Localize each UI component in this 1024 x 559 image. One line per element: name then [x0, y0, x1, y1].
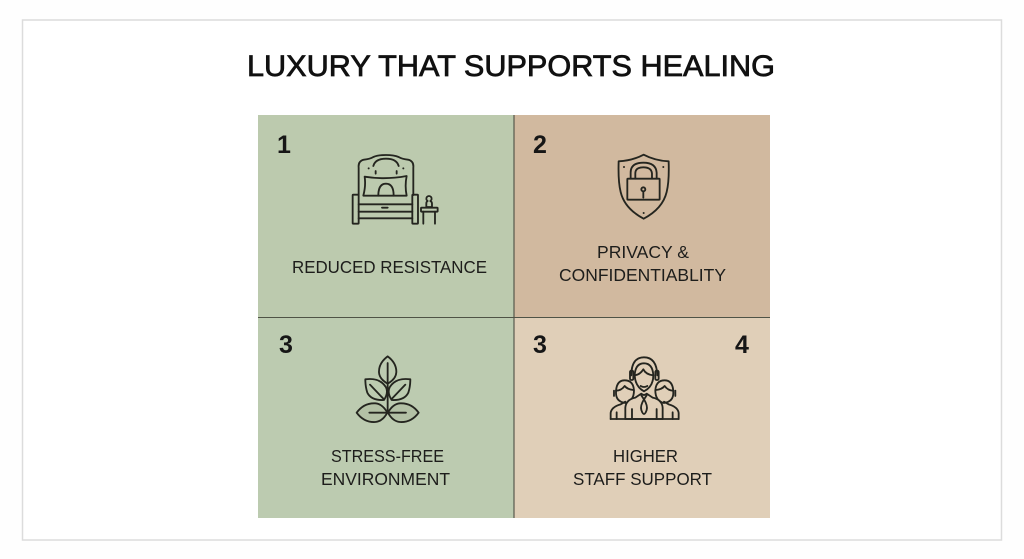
- panel: stress-free environment: ENVIRONMENT: [321, 469, 450, 489]
- number 1: 1: [277, 131, 291, 159]
- panel: higher staff support: STAFF SUPPORT: [573, 469, 712, 489]
- icon: shield with padlock: [619, 155, 669, 219]
- number 2: 2: [533, 131, 547, 159]
- label: REDUCED RESISTANCE: [292, 257, 487, 277]
- label: STRESS-FREE: [331, 446, 444, 466]
- number 3: 3: [279, 331, 293, 359]
- left staff member: [611, 380, 634, 419]
- panel: reduced resistance: [258, 115, 514, 317]
- panel: privacy and confidentiality: [514, 115, 770, 317]
- label: PRIVACY &: [597, 242, 689, 262]
- icon: staff group: [611, 357, 679, 419]
- panel: privacy and confidentiality: CONFIDENTIABLITY: [559, 265, 726, 285]
- title: LUXURY THAT SUPPORTS HEALING: [247, 50, 775, 83]
- number 4: 4: [735, 331, 749, 359]
- right staff member: [655, 380, 679, 419]
- panel: stress-free environment: [258, 317, 514, 518]
- icon: leaves: [357, 356, 419, 422]
- number 3: 3: [533, 331, 547, 359]
- centre staff member: [625, 357, 663, 419]
- panel: higher staff support: [514, 317, 770, 518]
- label: HIGHER: [613, 446, 678, 466]
- icon: bed: [353, 155, 438, 224]
